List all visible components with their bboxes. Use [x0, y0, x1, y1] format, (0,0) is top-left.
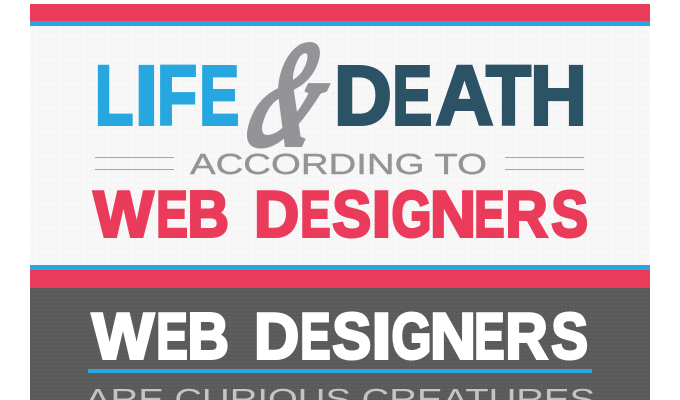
title word: DEATH: T	[486, 48, 531, 142]
heading: web designers: E	[474, 300, 505, 372]
heading: web designers: I	[372, 300, 391, 372]
title word: DEATH: E	[392, 48, 432, 142]
ampersand: &	[228, 9, 357, 178]
right double rule	[505, 157, 584, 170]
title: web designers: D	[254, 178, 299, 250]
title: web designers: E	[474, 178, 505, 250]
title: web designers: B	[188, 178, 229, 250]
title: web designers	[94, 178, 588, 250]
title word: DEATH: H	[530, 48, 587, 142]
heading: web designers: W	[92, 300, 155, 372]
title word: DEATH: A	[436, 48, 494, 142]
title word: LIFE	[95, 48, 239, 142]
heading: web designers: S	[551, 300, 588, 372]
heading: web designers	[92, 300, 588, 372]
title: web designers: G	[392, 178, 432, 250]
heading: web designers: E	[300, 300, 331, 372]
subtitle: according to: ACCORDING TO	[190, 149, 487, 181]
lower red band	[30, 270, 650, 288]
heading: web designers: S	[332, 300, 371, 372]
title word: LIFE: F	[157, 48, 197, 142]
panel: light title background	[30, 26, 650, 265]
title: web designers: I	[372, 178, 391, 250]
title word: DEATH: D	[334, 48, 392, 142]
left double rule	[95, 157, 174, 170]
lower blue band	[30, 265, 650, 270]
title: web designers: N	[430, 178, 476, 250]
title: web designers: E	[300, 178, 331, 250]
heading: web designers: R	[505, 300, 548, 372]
heading: web designers: D	[254, 300, 299, 372]
title: web designers: R	[505, 178, 548, 250]
title: web designers: S	[551, 178, 588, 250]
blue underline	[88, 369, 592, 373]
top blue band	[30, 21, 650, 26]
panel: dark section	[30, 288, 650, 400]
heading: web designers: N	[430, 300, 476, 372]
heading: web designers: B	[188, 300, 229, 372]
title: web designers: S	[332, 178, 371, 250]
title word: DEATH	[334, 48, 587, 142]
title: web designers: E	[156, 178, 188, 250]
heading: web designers: G	[392, 300, 432, 372]
top red band	[30, 4, 650, 21]
title word: LIFE: L	[95, 48, 134, 142]
title word: LIFE: I	[134, 48, 158, 142]
title word: LIFE: E	[199, 48, 239, 142]
title: web designers: W	[94, 178, 154, 250]
heading: web designers: E	[156, 300, 188, 372]
